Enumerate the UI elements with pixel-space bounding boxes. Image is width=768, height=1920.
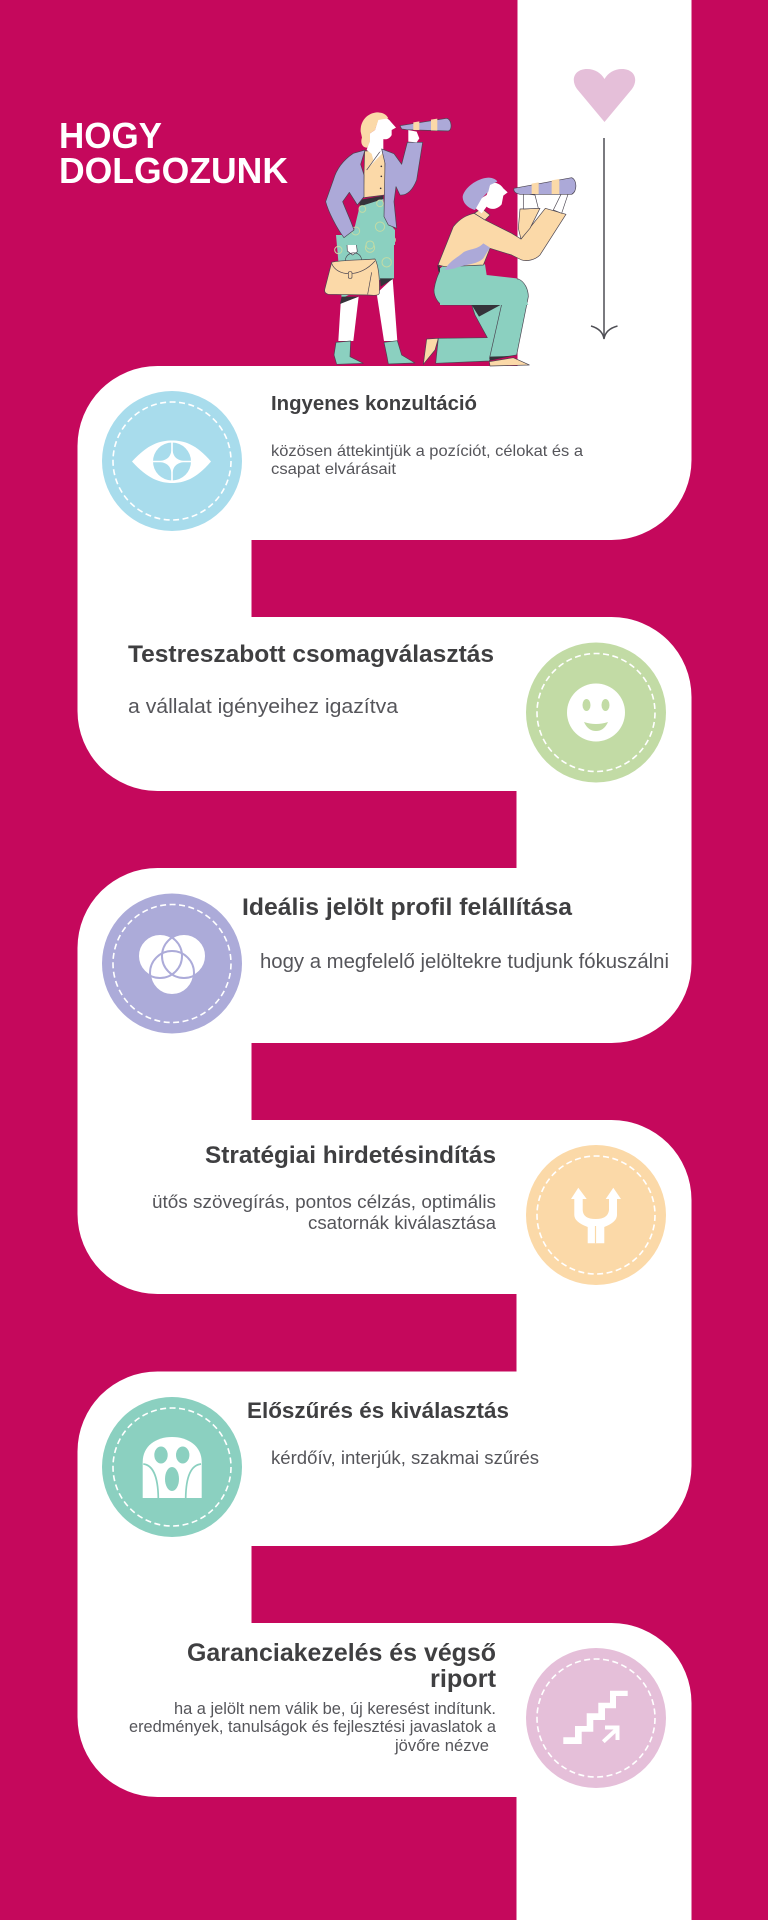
kneeling woman upper body xyxy=(438,178,576,305)
heading: Előszűrés és kiválasztás xyxy=(247,1398,509,1423)
illustration: two women with telescopes xyxy=(325,112,576,366)
heading: Garanciakezelés és végső xyxy=(187,1639,496,1667)
icon: eye xyxy=(102,391,242,531)
body text xyxy=(271,443,583,478)
icon: scream face xyxy=(102,1397,242,1537)
body text: eredmények, tanulságok és fejlesztési javaslatok a xyxy=(129,1718,497,1736)
panel: step 1 xyxy=(102,391,583,531)
body text: csapat elvárásait xyxy=(271,461,397,478)
body text xyxy=(129,1700,497,1755)
panel: step 3 xyxy=(102,894,669,1034)
panel: step 4 xyxy=(152,1142,666,1285)
standing woman upper body xyxy=(326,112,451,249)
body text: a vállalat igényeihez igazítva xyxy=(128,696,399,718)
body text xyxy=(152,1192,497,1233)
arrow: downward xyxy=(591,138,618,339)
icon: venn circles xyxy=(102,894,242,1034)
icon: stairs with arrow xyxy=(526,1648,666,1788)
panel: step 5 xyxy=(102,1397,539,1537)
body text: csatornák kiválasztása xyxy=(308,1213,497,1233)
standing woman lower body xyxy=(325,235,415,364)
icon: forked arrows xyxy=(526,1145,666,1285)
body text: közösen áttekintjük a pozíciót, célokat és a xyxy=(271,443,583,460)
body text: ha a jelölt nem válik be, új keresést indítunk. xyxy=(174,1700,496,1718)
title xyxy=(59,115,288,191)
heading: Stratégiai hirdetésindítás xyxy=(205,1142,496,1169)
heading: Testreszabott csomagválasztás xyxy=(128,641,494,668)
icon: smiley xyxy=(526,642,666,782)
panel: step 2 xyxy=(128,641,666,782)
icon: heart xyxy=(574,69,635,122)
panel: step 6 xyxy=(129,1639,666,1788)
body text: kérdőív, interjúk, szakmai szűrés xyxy=(271,1448,539,1468)
heading: Ideális jelölt profil felállítása xyxy=(242,894,573,921)
heading: riport xyxy=(430,1665,497,1693)
white winding path xyxy=(78,0,692,1920)
heading xyxy=(187,1639,497,1693)
body text: hogy a megfelelő jelöltekre tudjunk fókuszálni xyxy=(260,951,669,973)
title: DOLGOZUNK xyxy=(59,150,288,191)
heading: Ingyenes konzultáció xyxy=(271,393,477,415)
body text: ütős szövegírás, pontos célzás, optimális xyxy=(152,1192,496,1212)
title: HOGY xyxy=(59,115,162,156)
body text: jövőre nézve xyxy=(394,1737,489,1755)
kneeling woman lower body xyxy=(423,265,529,366)
